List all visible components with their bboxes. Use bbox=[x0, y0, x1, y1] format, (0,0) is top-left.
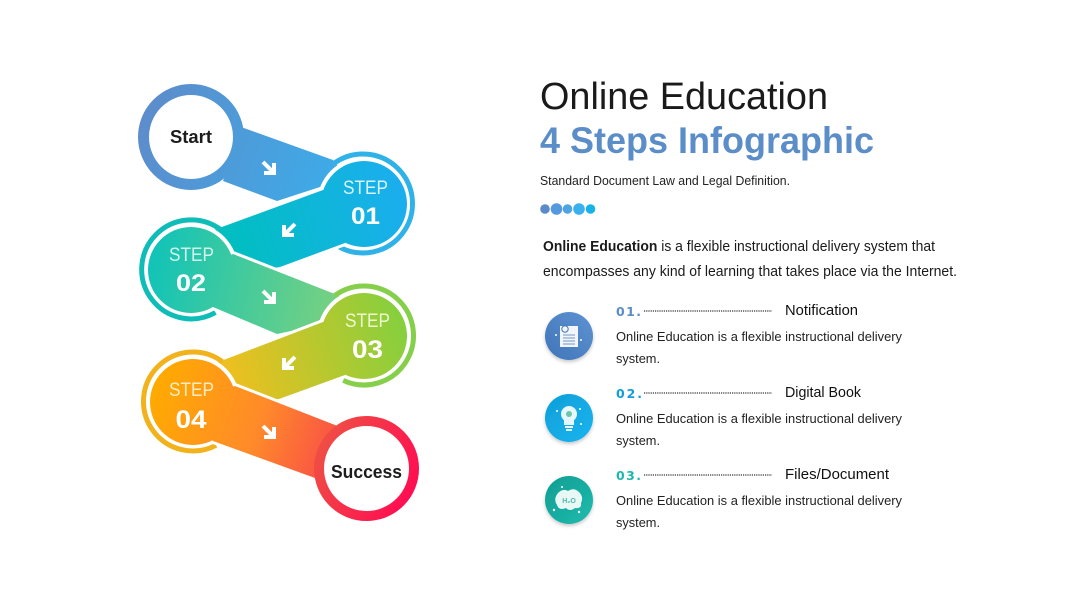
arrow: step 4 to success bbox=[263, 426, 274, 437]
number 02: 02. bbox=[616, 386, 642, 401]
heading: digital book: Digital Book bbox=[785, 385, 862, 401]
intro paragraph: encompasses any kind of learning that takes place via the Internet. bbox=[543, 264, 957, 280]
dot row bbox=[540, 203, 595, 215]
success node bbox=[319, 421, 414, 516]
icon: checklist document bbox=[545, 312, 593, 360]
intro paragraph bbox=[543, 239, 957, 280]
description: system. bbox=[616, 433, 660, 448]
heading: files/document: Files/Document bbox=[785, 467, 889, 483]
arrow: step 2 to step 3 bbox=[263, 291, 274, 302]
description: system. bbox=[616, 351, 660, 366]
step 2 node bbox=[142, 220, 352, 334]
description bbox=[616, 493, 902, 530]
title: Online Education bbox=[540, 76, 828, 118]
step 3 node: STEP bbox=[345, 311, 390, 332]
step 2 node: 02 bbox=[176, 270, 206, 297]
dotted leader bbox=[644, 310, 772, 312]
description: system. bbox=[616, 515, 660, 530]
description bbox=[616, 329, 902, 366]
heading: notification: Notification bbox=[785, 303, 858, 319]
description: Online Education is a flexible instructional delivery bbox=[616, 493, 902, 508]
dotted leader bbox=[644, 392, 772, 394]
description: Online Education is a flexible instructional delivery bbox=[616, 329, 902, 344]
dotted leader bbox=[644, 474, 772, 476]
icon: H2O splash bbox=[545, 476, 593, 524]
item 3: files/document bbox=[545, 467, 902, 530]
step 3 node bbox=[200, 286, 413, 405]
step 4 node: 04 bbox=[176, 406, 207, 434]
icon: light bulb bbox=[545, 394, 593, 442]
arrow: step 3 to step 4 bbox=[284, 357, 295, 368]
icon: H2O splash: H₂O bbox=[562, 498, 576, 505]
title: 4 Steps Infographic bbox=[540, 120, 874, 161]
step 1 node: STEP bbox=[343, 178, 388, 199]
start node with connector: Start bbox=[170, 126, 212, 147]
number 03: 03. bbox=[616, 468, 641, 483]
arrow: step 1 to step 2 bbox=[284, 224, 295, 235]
start node with connector bbox=[144, 90, 350, 201]
step 1 node bbox=[200, 154, 412, 275]
item 2: digital book bbox=[545, 385, 902, 448]
step flow diagram bbox=[142, 90, 414, 516]
title bbox=[540, 76, 874, 161]
step 3 node: 03 bbox=[352, 336, 383, 364]
description bbox=[616, 411, 902, 448]
success node: Success bbox=[331, 461, 402, 482]
step 1 node: 01 bbox=[351, 203, 380, 230]
step 2 node: STEP bbox=[169, 245, 214, 266]
description: Online Education is a flexible instructional delivery bbox=[616, 411, 902, 426]
step 4 node: STEP bbox=[169, 380, 214, 401]
intro paragraph: Online Education is a flexible instructional delivery system that bbox=[543, 239, 935, 255]
number 01: 01. bbox=[616, 304, 641, 319]
subtitle: Standard Document Law and Legal Definition. bbox=[540, 173, 790, 188]
step 4 node bbox=[143, 352, 372, 488]
item 1: notification bbox=[545, 303, 902, 366]
arrow: start to step 1 bbox=[263, 162, 274, 173]
